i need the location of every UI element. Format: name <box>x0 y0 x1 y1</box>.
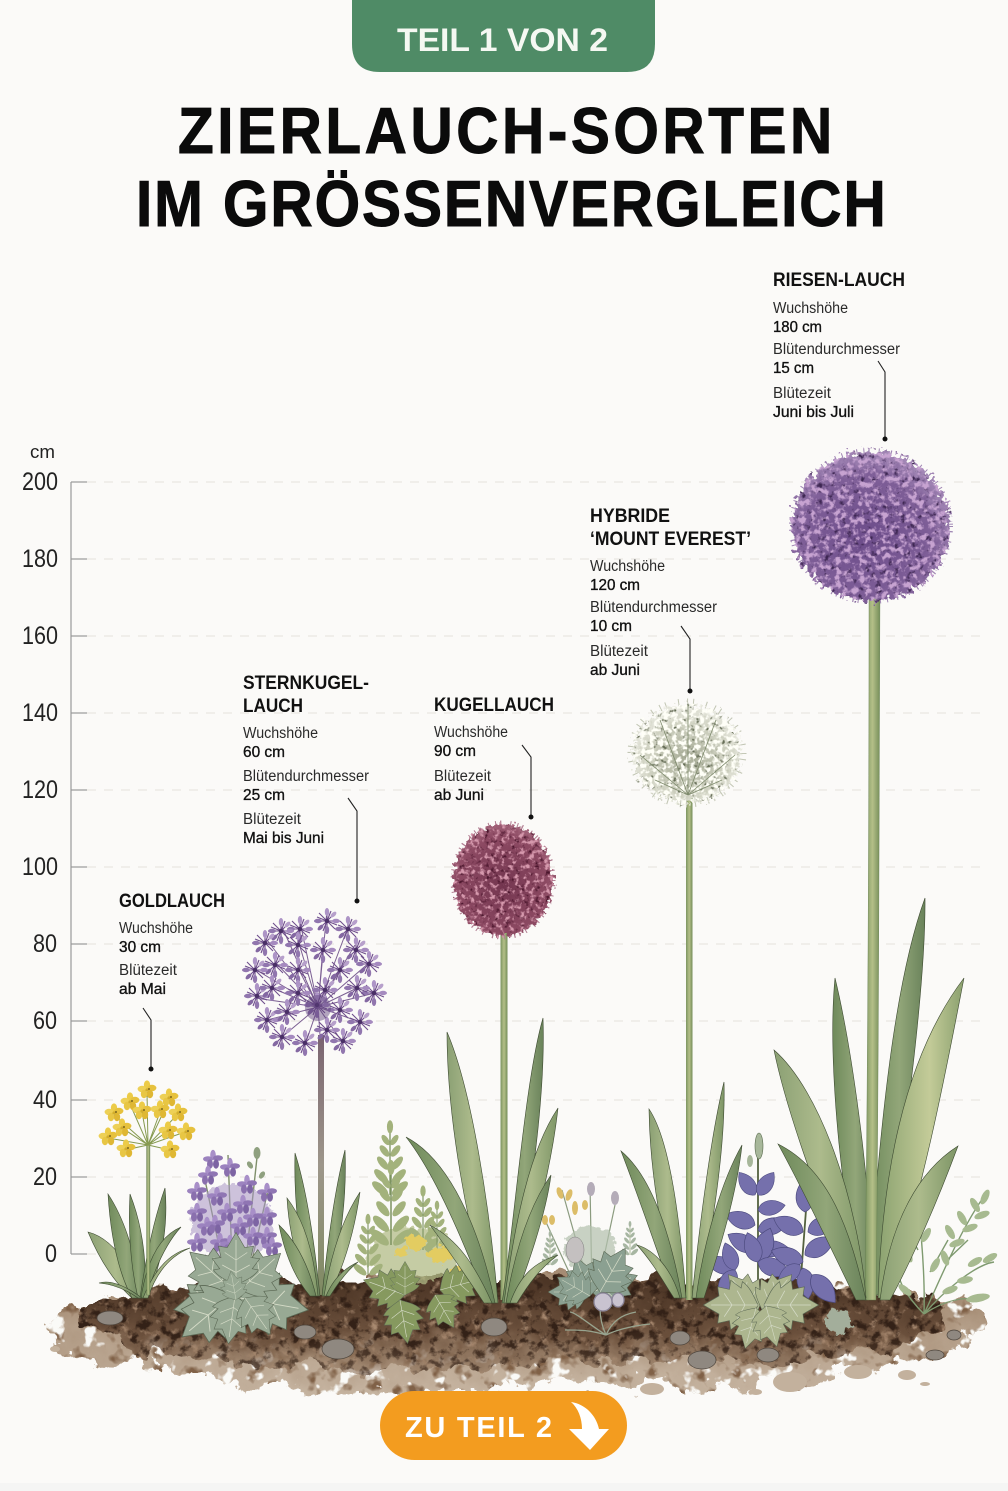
info block: Sternkugel-Lauch: Mai bis Juni <box>243 830 324 847</box>
info block: Riesen-Lauch: 15 cm <box>773 360 814 377</box>
Goldlauch leaves <box>88 1188 190 1298</box>
Riesen-Lauch flower head <box>792 451 950 601</box>
info block: Kugellauch: Wuchshöhe <box>434 724 508 741</box>
height axis in cm: 160 <box>22 622 58 650</box>
Sternkugel-Lauch stem <box>318 1035 324 1295</box>
info block: Hybride Mount Everest: 10 cm <box>590 618 632 635</box>
height axis in cm <box>22 442 980 1268</box>
info block: Riesen-Lauch <box>773 270 905 442</box>
info block: Goldlauch: Blütezeit <box>119 962 178 979</box>
plant: Riesen-Lauch <box>774 451 964 1300</box>
badge: part 1 of 2: TEIL 1 VON 2 <box>397 22 608 58</box>
button: to part 2: ZU TEIL 2 <box>405 1412 552 1444</box>
Sternkugel-Lauch flower head <box>242 908 387 1056</box>
info block: Goldlauch: ab Mai <box>119 981 166 998</box>
info block: Sternkugel-Lauch: 60 cm <box>243 744 285 761</box>
info block: Riesen-Lauch: Wuchshöhe <box>773 300 848 317</box>
info block: Goldlauch: Wuchshöhe <box>119 920 193 937</box>
Kugellauch flower head <box>453 823 553 937</box>
plant: Kugellauch <box>406 823 558 1303</box>
stones in the soil <box>97 1311 961 1369</box>
Riesen-Lauch leaves in front of stem <box>774 978 964 1300</box>
info block: Sternkugel-Lauch: STERNKUGEL- <box>243 673 369 694</box>
info block: Sternkugel-Lauch: LAUCH <box>243 696 303 717</box>
button: to part 2 <box>380 1391 627 1460</box>
info block: Riesen-Lauch: Blütezeit <box>773 385 832 402</box>
badge: part 1 of 2 <box>352 0 655 72</box>
Mount Everest stem <box>686 795 692 1300</box>
info block: Riesen-Lauch: RIESEN-LAUCH <box>773 270 905 291</box>
info block: Kugellauch <box>434 695 554 820</box>
info block: Kugellauch: 90 cm <box>434 743 476 760</box>
height axis in cm: 120 <box>22 776 58 804</box>
height axis in cm: 180 <box>22 545 58 573</box>
background plant: silver bush with small buds <box>541 1182 645 1313</box>
info block: Hybride Mount Everest: Blütendurchmesser <box>590 599 717 616</box>
height axis in cm: 100 <box>22 853 58 881</box>
info block: Hybride Mount Everest: Wuchshöhe <box>590 558 665 575</box>
soil bed <box>47 1277 987 1395</box>
height axis in cm: 20 <box>33 1163 57 1191</box>
height axis in cm: 200 <box>22 468 58 496</box>
Goldlauch flower umbel <box>99 1080 195 1158</box>
height axis in cm: 40 <box>33 1086 57 1114</box>
background plant: silver-green leaf rosette <box>163 1232 314 1359</box>
info block: Hybride Mount Everest: 120 cm <box>590 577 640 594</box>
info block: Hybride Mount Everest: ab Juni <box>590 662 640 679</box>
plant: Sternkugel-Lauch <box>242 908 387 1296</box>
info block: Kugellauch: Blütezeit <box>434 768 492 785</box>
title: ZIERLAUCH-SORTEN <box>178 95 832 168</box>
info block: Kugellauch: ab Juni <box>434 787 484 804</box>
Mount Everest flower head <box>631 702 743 804</box>
height axis in cm: 80 <box>33 930 57 958</box>
info block: Sternkugel-Lauch: Wuchshöhe <box>243 725 318 742</box>
background plant: purple lavender bush <box>187 1147 282 1260</box>
title: IM GRÖSSENVERGLEICH <box>136 168 886 241</box>
info block: Hybride Mount Everest: Blütezeit <box>590 643 649 660</box>
height axis in cm: cm <box>30 442 55 462</box>
info block: Sternkugel-Lauch: Blütezeit <box>243 811 302 828</box>
info block: Goldlauch <box>119 891 225 1072</box>
info block: Hybride Mount Everest <box>590 506 751 694</box>
Kugellauch leaves <box>406 1018 558 1303</box>
info block: Sternkugel-Lauch: Blütendurchmesser <box>243 768 369 785</box>
background plant: fern <box>894 1188 999 1314</box>
background plant: yellow-green bush <box>351 1120 488 1347</box>
info block: Goldlauch: GOLDLAUCH <box>119 891 225 912</box>
Riesen-Lauch leaves behind stem <box>833 898 925 1295</box>
small crocus plant <box>565 1293 650 1335</box>
info block: Riesen-Lauch: Juni bis Juli <box>773 404 854 421</box>
info block: Kugellauch: KUGELLAUCH <box>434 695 554 716</box>
info block: Riesen-Lauch: 180 cm <box>773 319 822 336</box>
height axis in cm: 60 <box>33 1007 57 1035</box>
icon: curved down arrow <box>569 1402 609 1450</box>
info block: Sternkugel-Lauch <box>243 673 369 904</box>
height axis in cm: 140 <box>22 699 58 727</box>
background plant: small grey seedling <box>825 1309 851 1335</box>
info block: Riesen-Lauch: Blütendurchmesser <box>773 341 900 358</box>
plant: Goldlauch <box>88 1080 195 1298</box>
info block: Sternkugel-Lauch: 25 cm <box>243 787 285 804</box>
info block: Goldlauch: 30 cm <box>119 939 161 956</box>
title <box>136 95 886 241</box>
Kugellauch stem <box>500 925 508 1300</box>
height axis in cm: 0 <box>45 1240 57 1268</box>
Sternkugel-Lauch leaves <box>279 1150 360 1296</box>
background plant: blue-violet flower <box>703 1133 842 1353</box>
info block: Hybride Mount Everest: ‘MOUNT EVEREST’ <box>590 529 751 550</box>
Riesen-Lauch stem <box>865 590 880 1300</box>
Mount Everest leaves <box>621 1082 742 1298</box>
info block: Hybride Mount Everest: HYBRIDE <box>590 506 670 527</box>
plant: Hybride Mount Everest <box>621 702 743 1300</box>
Goldlauch stem <box>146 1145 150 1295</box>
